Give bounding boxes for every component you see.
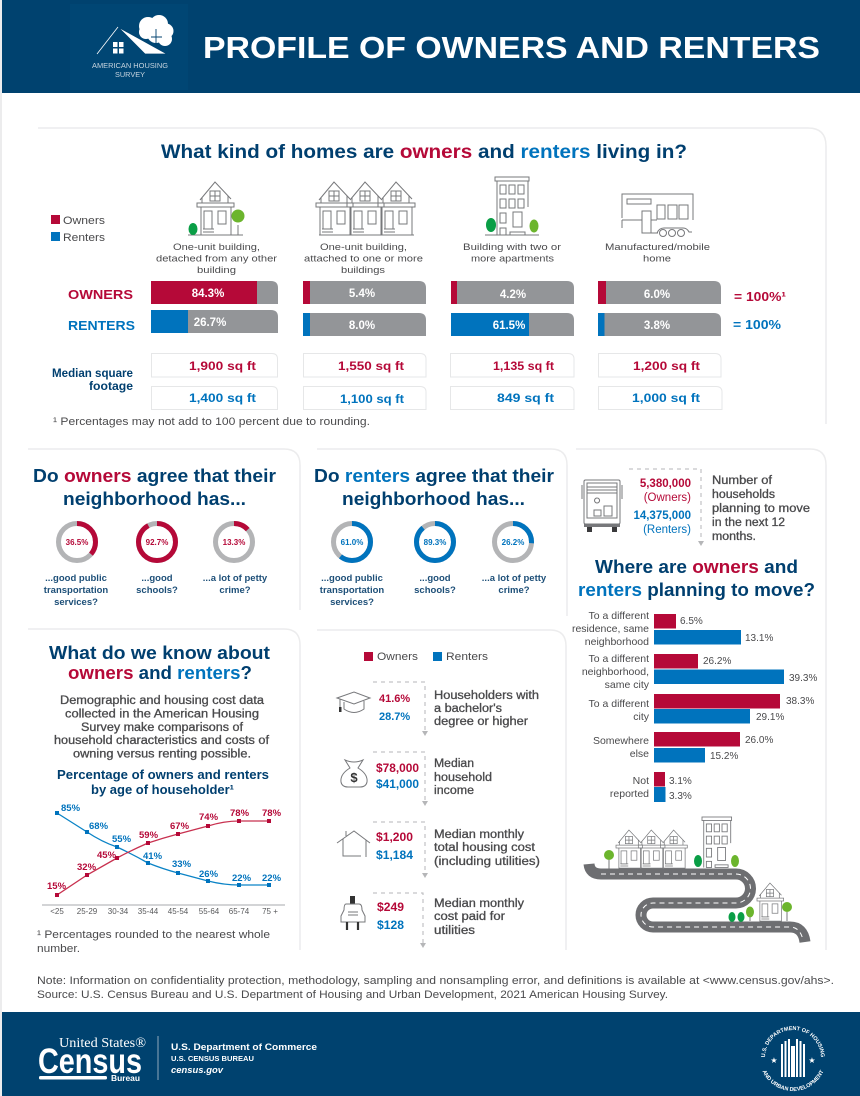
source note: [37, 975, 834, 1001]
row labels: RENTERS: [68, 318, 135, 333]
item: utilities: $128: [377, 920, 405, 932]
text: description: [54, 695, 270, 760]
donut: renters crime: 26.2%: [502, 538, 524, 547]
owners line: 78%: [230, 808, 250, 819]
item: bachelor's degree: [337, 682, 539, 736]
text: households planning to move: Number of: [712, 475, 773, 487]
HUD seal: AND URBAN DEVELOPMENT: [762, 1070, 823, 1092]
panel: moving plans: [572, 449, 826, 950]
item: utilities: Median monthly: [434, 898, 524, 910]
item: utilities: utilities: [434, 925, 475, 937]
captions: renters donuts: transportation: [320, 585, 384, 596]
median square footage label: [52, 368, 133, 393]
median square footage label: Median square: [52, 368, 133, 380]
bars: [654, 614, 784, 802]
owners line: [47, 808, 282, 897]
captions: owners donuts: services?: [54, 597, 98, 608]
square footage boxes: 1,200 sq ft: [633, 359, 700, 373]
stacked bars: renters: 3.8%: [644, 320, 670, 332]
item: household income: household: [434, 772, 492, 784]
heading: what do we know: [49, 643, 270, 683]
legend: owners renters: Renters: [446, 651, 489, 663]
heading: where planning to move: Where are owners and: [595, 557, 798, 577]
captions: renters donuts: ...a lot of petty: [482, 573, 547, 584]
icon: money bag: [341, 760, 367, 787]
icon: attached houses: [316, 182, 415, 235]
source note: Source: U.S. Census Bureau and U.S. Department of Housing and Urban Development, 2021 American Housing Survey.: [37, 989, 668, 1001]
panel: what kind of homes: [38, 128, 826, 428]
stacked bars: renters: 61.5%: [493, 320, 525, 332]
value labels: 39.3%: [789, 673, 817, 684]
item: bachelor's degree: Householders with: [434, 690, 539, 702]
item: household income: $41,000: [376, 779, 419, 791]
row labels: [68, 287, 135, 333]
panel: what do we know: [28, 629, 300, 955]
text: households planning to move: households: [712, 489, 775, 501]
title: PROFILE OF OWNERS AND RENTERS: [203, 30, 820, 65]
heading: homes: What kind of homes are owners and renters living in?: [161, 142, 687, 163]
age axis labels: 35-44: [138, 907, 159, 916]
footer: [2, 1012, 860, 1096]
stacked bars: renters: [151, 310, 721, 336]
owners line: 67%: [170, 821, 190, 832]
donut: owners schools: 92.7%: [146, 538, 168, 547]
item: housing cost: total housing cost: [434, 842, 536, 854]
legend: owners renters: [364, 651, 489, 663]
HUD seal: [761, 1026, 825, 1092]
census bureau logo: Census: [38, 1042, 142, 1081]
item: housing cost: (including utilities): [434, 856, 540, 868]
donut: renters schools: [416, 524, 454, 560]
row labels: OWNERS: [68, 287, 133, 302]
arrow: dashed bracket: [629, 469, 704, 546]
renters line: 85%: [61, 803, 81, 814]
value labels: [669, 616, 817, 802]
heading: owners agree: neighborhood has...: [63, 489, 246, 509]
captions: home types: [156, 242, 710, 276]
stacked bars: owners: [151, 281, 721, 304]
item: household income: Median: [434, 758, 474, 770]
median square footage label: footage: [89, 381, 133, 393]
renters line: [55, 803, 282, 887]
value labels: 29.1%: [756, 712, 784, 723]
stacked bars: renters: 26.7%: [194, 317, 226, 329]
renters line: 26%: [199, 869, 219, 880]
donut: owners transportation: 36.5%: [66, 538, 88, 547]
icon: apartment building: [485, 177, 539, 235]
square footage boxes: 1,135 sq ft: [493, 359, 554, 373]
text: description: owning versus renting possible.: [73, 748, 251, 760]
captions: owners donuts: ...good public: [45, 573, 107, 584]
item: household income: $78,000: [376, 763, 419, 775]
legend: owners and renters: Owners: [63, 215, 106, 227]
icon: detached house: [188, 182, 244, 235]
captions: home types: Manufactured/mobile: [605, 242, 710, 253]
category labels: Somewhere: [593, 735, 649, 747]
category labels: To a different: [588, 653, 649, 665]
category labels: Not: [633, 775, 649, 787]
census bureau logo: United States®: [59, 1036, 146, 1051]
heading: owners agree: Do owners agree that their: [33, 466, 276, 486]
renters line: 22%: [262, 873, 282, 884]
line chart: age of householder: [42, 803, 285, 916]
captions: renters donuts: ...good: [419, 573, 451, 584]
square footage boxes: 1,000 sq ft: [632, 391, 700, 405]
value labels: 3.3%: [669, 791, 692, 802]
item: household income: income: [434, 785, 474, 797]
captions: home types: One-unit building,: [320, 242, 407, 253]
icon: plug: [341, 896, 365, 930]
category labels: [572, 610, 650, 800]
text: description: Demographic and housing cost data: [60, 695, 265, 707]
stacked bars: owners: 4.2%: [500, 289, 526, 301]
owners line: 78%: [262, 808, 282, 819]
heading: age chart: Percentage of owners and renters: [57, 768, 269, 782]
heading: owners agree: [33, 466, 276, 509]
stacked bars: renters: 8.0%: [349, 320, 375, 332]
donut: renters crime: [494, 524, 532, 560]
household counts: [633, 478, 691, 536]
heading: what do we know: owners and renters?: [68, 663, 252, 683]
category labels: reported: [610, 788, 649, 800]
background edge: [0, 0, 2, 1096]
heading: where planning to move: renters planning to move?: [578, 580, 815, 600]
text: households planning to move: in the next 12: [712, 517, 785, 529]
footnote: rounding: ¹ Percentages may not add to 100 percent due to rounding.: [53, 416, 370, 428]
donut: renters transportation: 61.0%: [341, 538, 363, 547]
owners line: 15%: [47, 881, 67, 892]
captions: home types: attached to one or more: [304, 254, 423, 264]
square footage boxes: 849 sq ft: [497, 391, 554, 405]
item: housing cost: [337, 822, 540, 878]
heading: where planning to move: [578, 557, 815, 600]
header banner: [2, 0, 860, 93]
totals: = 100%: [733, 318, 781, 332]
department text: census.gov: [171, 1065, 224, 1075]
household counts: (Owners): [644, 492, 691, 504]
captions: owners donuts: crime?: [219, 585, 251, 596]
text: description: household characteristics and costs of: [54, 735, 270, 747]
item: bachelor's degree: 41.6%: [379, 693, 410, 705]
totals: [733, 290, 786, 332]
item: utilities: cost paid for: [434, 911, 505, 923]
age axis labels: 75 +: [262, 907, 278, 916]
legend: owners and renters: Renters: [63, 232, 106, 244]
renters line: 68%: [89, 821, 109, 832]
donut: owners schools: [138, 524, 176, 560]
category labels: same city: [605, 679, 650, 691]
value labels: 38.3%: [786, 696, 814, 707]
square footage boxes: 1,400 sq ft: [189, 391, 256, 405]
value labels: 13.1%: [745, 633, 773, 644]
household counts: 14,375,000: [633, 510, 691, 522]
captions: home types: buildings: [341, 265, 385, 276]
item: utilities: [341, 893, 524, 948]
heading: age chart: by age of householder¹: [91, 783, 234, 797]
captions: home types: more apartments: [471, 254, 554, 264]
HUD seal: U.S. DEPARTMENT OF HOUSING: [761, 1026, 825, 1057]
square footage boxes: 1,550 sq ft: [338, 359, 404, 373]
icon: American Housing Survey logo: SURVEY: [115, 72, 145, 79]
captions: renters donuts: services?: [330, 597, 374, 608]
icon: house outline: [337, 831, 370, 857]
item: household income: [341, 752, 492, 806]
stacked bars: owners: 6.0%: [644, 289, 670, 301]
captions: home types: Building with two or: [463, 242, 561, 253]
renters line: 22%: [232, 873, 252, 884]
department text: [171, 1042, 317, 1075]
owners line: 59%: [139, 830, 159, 841]
captions: owners donuts: transportation: [44, 585, 108, 596]
text: households planning to move: [712, 475, 810, 543]
category labels: neighborhood,: [582, 666, 649, 678]
donut: owners crime: 13.3%: [223, 538, 245, 547]
item: utilities: $249: [377, 902, 404, 914]
item: bachelor's degree: 28.7%: [379, 711, 410, 723]
heading: renters agree: [314, 466, 554, 509]
illustration: road with homes: [589, 817, 805, 942]
captions: owners donuts: ...good: [141, 573, 173, 584]
item: bachelor's degree: a bachelor's: [434, 703, 502, 715]
item: bachelor's degree: degree or higher: [434, 716, 528, 728]
donut: owners transportation: [58, 524, 96, 560]
value labels: 3.1%: [669, 776, 692, 787]
household counts: 5,380,000: [640, 478, 691, 490]
square footage boxes: 1,100 sq ft: [340, 392, 404, 406]
icon: moving truck: [582, 480, 622, 532]
heading: renters agree: Do renters agree that their: [314, 466, 554, 486]
text: households planning to move: planning to move: [712, 503, 810, 515]
age axis labels: 45-54: [168, 907, 189, 916]
owners line: 45%: [97, 850, 117, 861]
renters line: 41%: [143, 851, 163, 862]
panel: characteristics comparison: [317, 630, 566, 950]
captions: owners donuts: ...a lot of petty: [203, 573, 268, 584]
captions: home types: home: [643, 254, 671, 264]
category labels: city: [633, 711, 650, 723]
source note: Note: Information on confidentiality protection, methodology, sampling and nonsampling error, and definitions is available at <www.census.gov/ahs>.: [37, 975, 834, 987]
donut: renters transportation: [334, 524, 370, 560]
panel: owners neighborhood: [28, 449, 300, 610]
value labels: 26.2%: [703, 656, 731, 667]
captions: renters donuts: [320, 573, 547, 608]
heading: age chart: [57, 768, 269, 797]
square footage boxes: 1,900 sq ft: [189, 359, 256, 373]
icon: money bag: $: [350, 770, 358, 785]
age axis labels: 65-74: [229, 907, 250, 916]
donut: owners crime: [216, 524, 252, 560]
department text: U.S. Department of Commerce: [171, 1042, 317, 1053]
icon: mobile home: [622, 194, 693, 236]
household counts: (Renters): [643, 524, 691, 536]
captions: owners donuts: schools?: [136, 585, 178, 596]
panel: renters neighborhood: [314, 449, 567, 616]
value labels: 15.2%: [710, 751, 738, 762]
category labels: else: [630, 748, 649, 760]
item: housing cost: $1,184: [376, 850, 414, 862]
age axis labels: 30-34: [108, 907, 129, 916]
renters line: 33%: [172, 859, 192, 870]
item: housing cost: $1,200: [376, 832, 413, 844]
census bureau logo: Bureau: [111, 1073, 140, 1083]
donut: renters schools: 89.3%: [424, 538, 446, 547]
captions: renters donuts: ...good public: [321, 573, 383, 584]
stacked bars: owners: 84.3%: [192, 288, 224, 300]
renters line: 55%: [112, 834, 132, 845]
owners line: 74%: [199, 812, 219, 823]
age axis labels: [50, 907, 278, 916]
captions: home types: One-unit building,: [173, 242, 260, 253]
text: description: Survey make comparisons of: [81, 722, 244, 734]
stacked bars: owners: 5.4%: [349, 288, 375, 300]
category labels: neighborhood: [585, 636, 649, 648]
owners line: 32%: [77, 862, 97, 873]
legend: owners renters: Owners: [377, 651, 419, 663]
footnote: rounded percentages: number.: [37, 943, 80, 955]
footnote: rounded percentages: ¹ Percentages rounded to the nearest whole: [37, 929, 270, 941]
footnote: rounded percentages: [37, 929, 270, 955]
category labels: To a different: [588, 610, 649, 622]
heading: what do we know: What do we know about: [49, 643, 270, 663]
icon: graduation cap: [337, 692, 370, 712]
age axis labels: 25-29: [77, 907, 98, 916]
square footage boxes: [152, 354, 722, 410]
bar chart: where moving: [572, 610, 817, 802]
captions: renters donuts: crime?: [498, 585, 530, 596]
captions: renters donuts: schools?: [414, 585, 456, 596]
icon: American Housing Survey logo: [92, 15, 174, 79]
captions: owners donuts: [44, 573, 268, 608]
totals: = 100%¹: [734, 290, 786, 304]
heading: renters agree: neighborhood has...: [342, 489, 525, 509]
category labels: residence, same: [572, 623, 649, 635]
icon: American Housing Survey logo: AMERICAN HOUSING: [92, 63, 168, 70]
value labels: 6.5%: [680, 616, 703, 627]
text: households planning to move: months.: [712, 531, 756, 543]
captions: home types: detached from any other: [156, 254, 277, 264]
HUD seal: ★: [808, 1056, 816, 1065]
legend: owners and renters: [51, 215, 106, 244]
age axis labels: <25: [50, 907, 64, 916]
department text: U.S. CENSUS BUREAU: [171, 1054, 254, 1063]
item: housing cost: Median monthly: [434, 829, 524, 841]
category labels: To a different: [588, 698, 649, 710]
captions: home types: building: [197, 265, 236, 276]
text: description: collected in the American Housing: [65, 708, 259, 720]
age axis labels: 55-64: [199, 907, 220, 916]
value labels: 26.0%: [745, 735, 773, 746]
HUD seal: ★: [770, 1056, 778, 1065]
